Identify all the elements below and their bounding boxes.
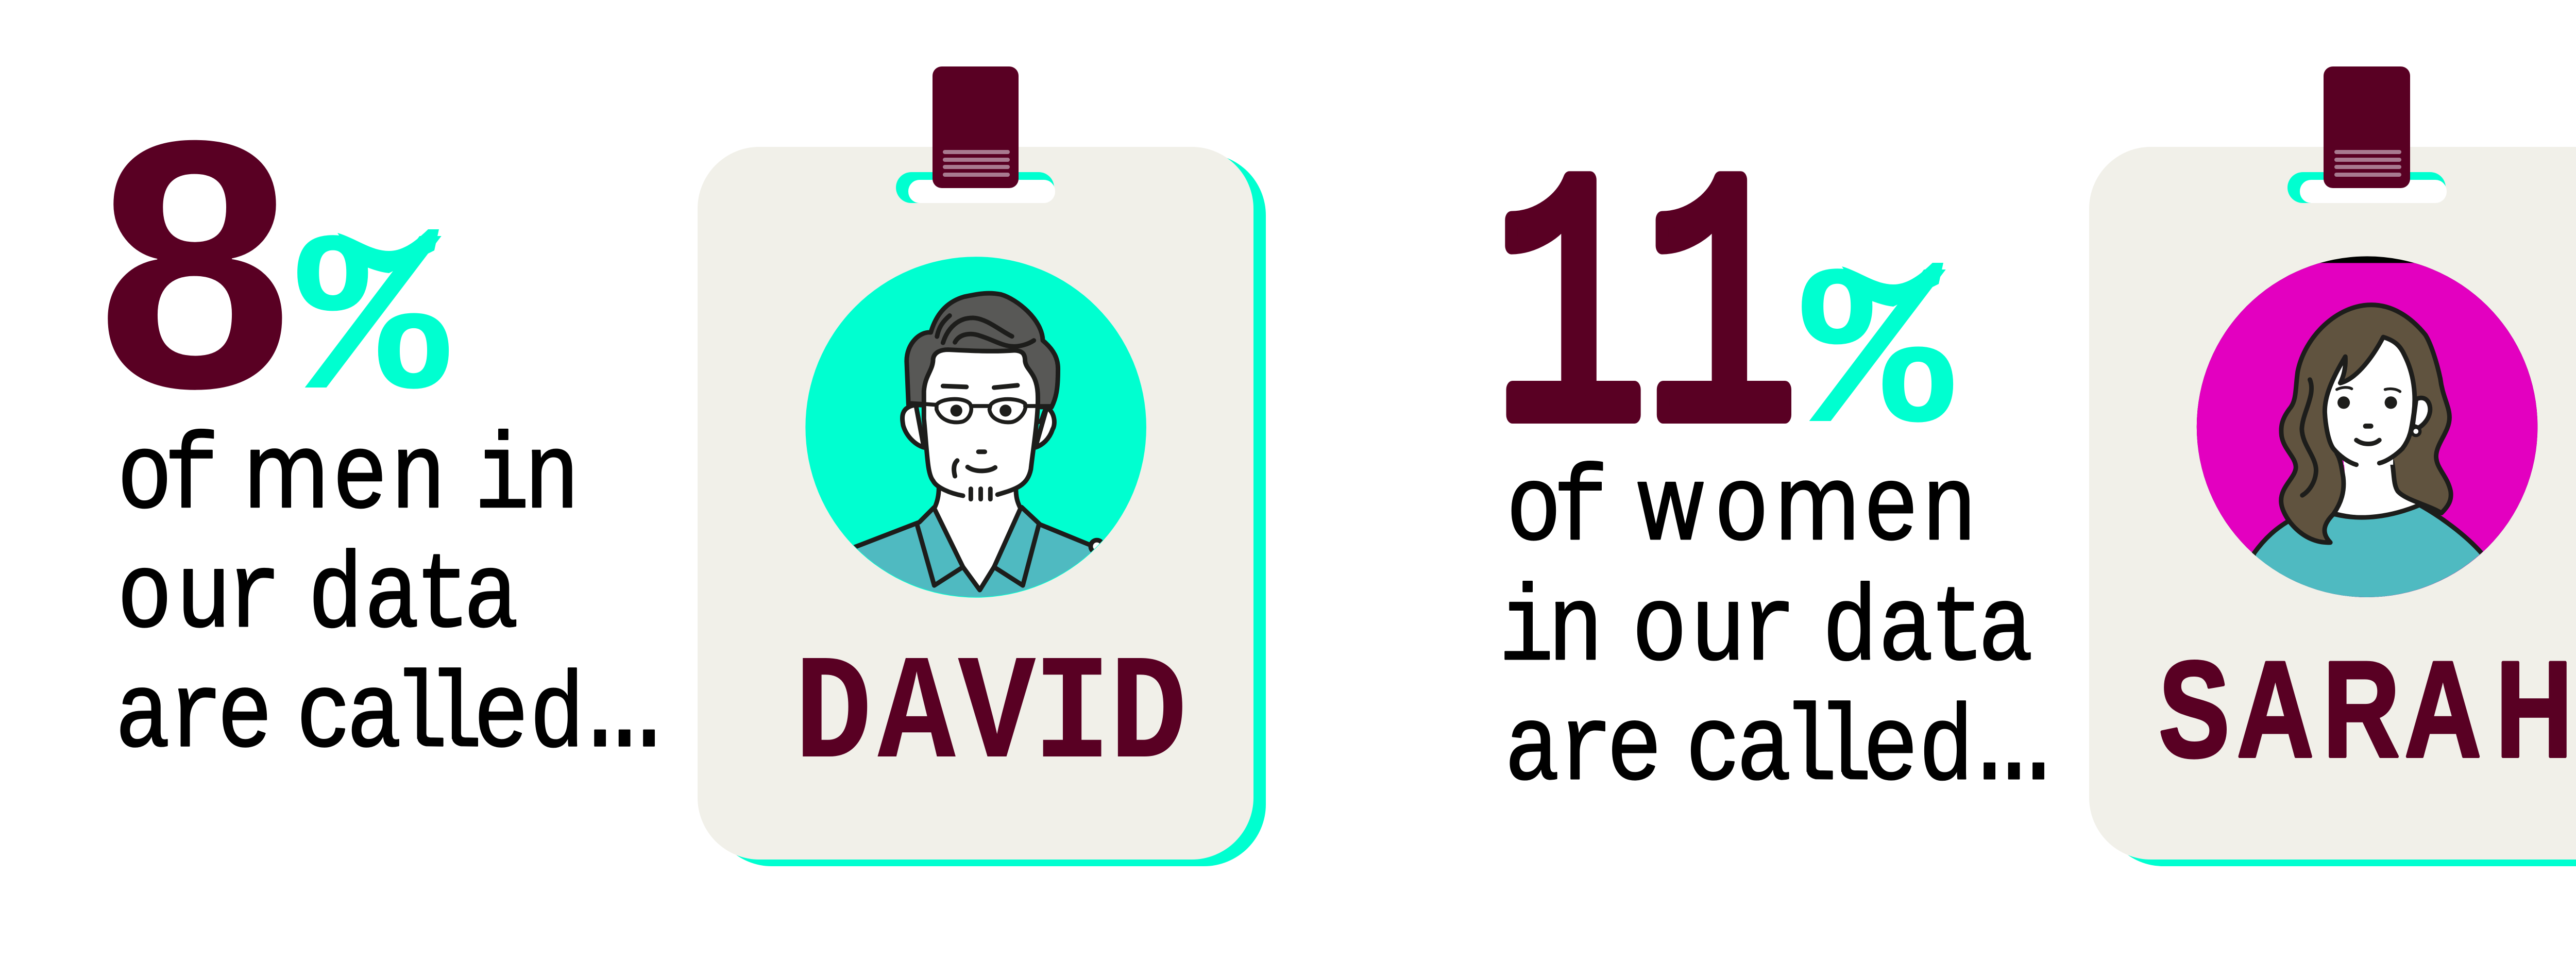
panel: Sarah badge: [2089, 66, 2576, 866]
lanyard slot: [2287, 172, 2447, 203]
big number: 8: 8: [97, 68, 293, 462]
badge card: [2089, 147, 2576, 860]
name: SARAH: SARAH: [2159, 633, 2572, 786]
text: of women in our data are called: in our data: [1499, 570, 2033, 692]
portrait: David: [805, 257, 1146, 608]
text: of women in our data are called: are called...: [1504, 690, 2066, 812]
text: of men in our data are called: our data: [117, 537, 519, 659]
text: of men in our data are called: [115, 411, 676, 779]
name: DAVID: DAVID: [794, 632, 1188, 801]
text: of women in our data are called: [1499, 443, 2066, 812]
big number: 11: 11: [1493, 119, 1798, 523]
badge shadow: [2102, 154, 2576, 866]
text: of men in our data are called: are called...: [115, 658, 676, 779]
badge clip: [2324, 66, 2410, 188]
text: of women in our data are called: of women: [1506, 443, 1977, 571]
percent sign: men: %: [297, 197, 451, 457]
percent sign: women: %: [1802, 231, 1955, 490]
badge card: [698, 147, 1253, 860]
panel: David badge: [698, 66, 1266, 866]
badge shadow: [710, 154, 1266, 866]
text: of men in our data are called: of men in: [117, 411, 580, 540]
badge clip: [933, 66, 1019, 188]
portrait: Sarah: [2197, 256, 2537, 601]
lanyard slot: [896, 172, 1055, 203]
